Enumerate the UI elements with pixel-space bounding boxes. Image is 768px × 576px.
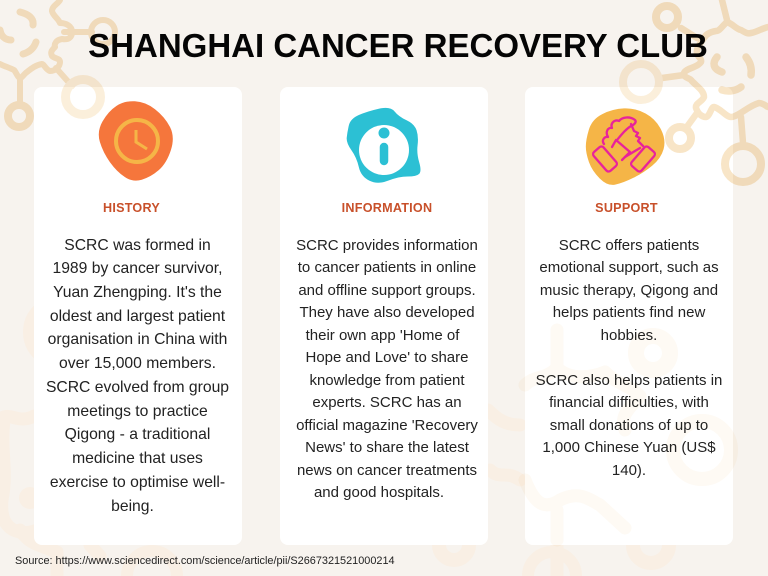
text: information body: and offline support groups. — [298, 282, 476, 298]
text: information body: and good hospitals. — [314, 484, 444, 501]
text: information body: They have also developed — [299, 304, 475, 321]
panel: information — [280, 87, 488, 545]
text: support body: SCRC offers patients — [559, 236, 699, 254]
text: support body: financial difficulties, with — [549, 394, 709, 411]
heading: history: HISTORY — [103, 201, 160, 215]
source note: Source: https://www.sciencedirect.com/science/article/pii/S2667321521000214 — [15, 555, 395, 567]
text: information body: Hope and Love' to share — [306, 349, 468, 366]
text: information body: to cancer patients in online — [298, 259, 476, 276]
text: history body: over 15,000 members. — [59, 355, 216, 372]
text: support body: small donations of up to — [550, 416, 708, 434]
text: support body — [536, 236, 722, 478]
text: history body — [46, 236, 229, 515]
panel: support — [525, 87, 733, 545]
text: information body: their own app 'Home of — [306, 326, 459, 344]
text: history body: 1989 by cancer survivor, — [52, 260, 223, 277]
icon: information — [346, 108, 420, 183]
text: history body: being. — [111, 498, 154, 515]
text: support body: helps patients find new — [553, 304, 705, 321]
text: history body: Yuan Zhengping. It's the — [53, 284, 222, 301]
text: history body: medicine that uses — [72, 450, 203, 467]
text: support body: hobbies. — [601, 326, 657, 344]
panel: history — [34, 87, 242, 545]
heading: information: INFORMATION — [342, 201, 432, 215]
text: history body: SCRC evolved from group — [46, 379, 229, 396]
heading: support: SUPPORT — [595, 201, 658, 215]
icon: support handshake — [586, 108, 664, 185]
text: information body: experts. SCRC has an — [312, 394, 462, 411]
text: history body: organisation in China with — [48, 331, 227, 348]
title: SHANGHAI CANCER RECOVERY CLUB — [88, 27, 708, 64]
text: information body: knowledge from patient — [309, 372, 465, 388]
icon: clock — [98, 101, 173, 181]
text: support body: 1,000 Chinese Yuan (US$ — [542, 439, 716, 456]
text: support body: 140). — [612, 462, 646, 478]
text: history body: exercise to optimise well- — [50, 474, 225, 491]
text: support body: emotional support, such as — [539, 259, 719, 276]
text: history body: oldest and largest patient — [50, 308, 225, 325]
text: information body: News' to share the latest — [305, 439, 469, 456]
text: history body: SCRC was formed in — [64, 236, 211, 254]
text: information body: news on cancer treatments — [297, 462, 477, 478]
text: information body: official magazine 'Recovery — [296, 416, 478, 434]
text: support body: music therapy, Qigong and — [540, 282, 718, 298]
text: information body — [296, 236, 478, 501]
text: history body: Qigong - a traditional — [65, 426, 210, 443]
text: history body: meetings to practice — [67, 403, 208, 420]
text: information body: SCRC provides information — [296, 236, 478, 254]
text: support body: SCRC also helps patients in — [536, 372, 722, 388]
